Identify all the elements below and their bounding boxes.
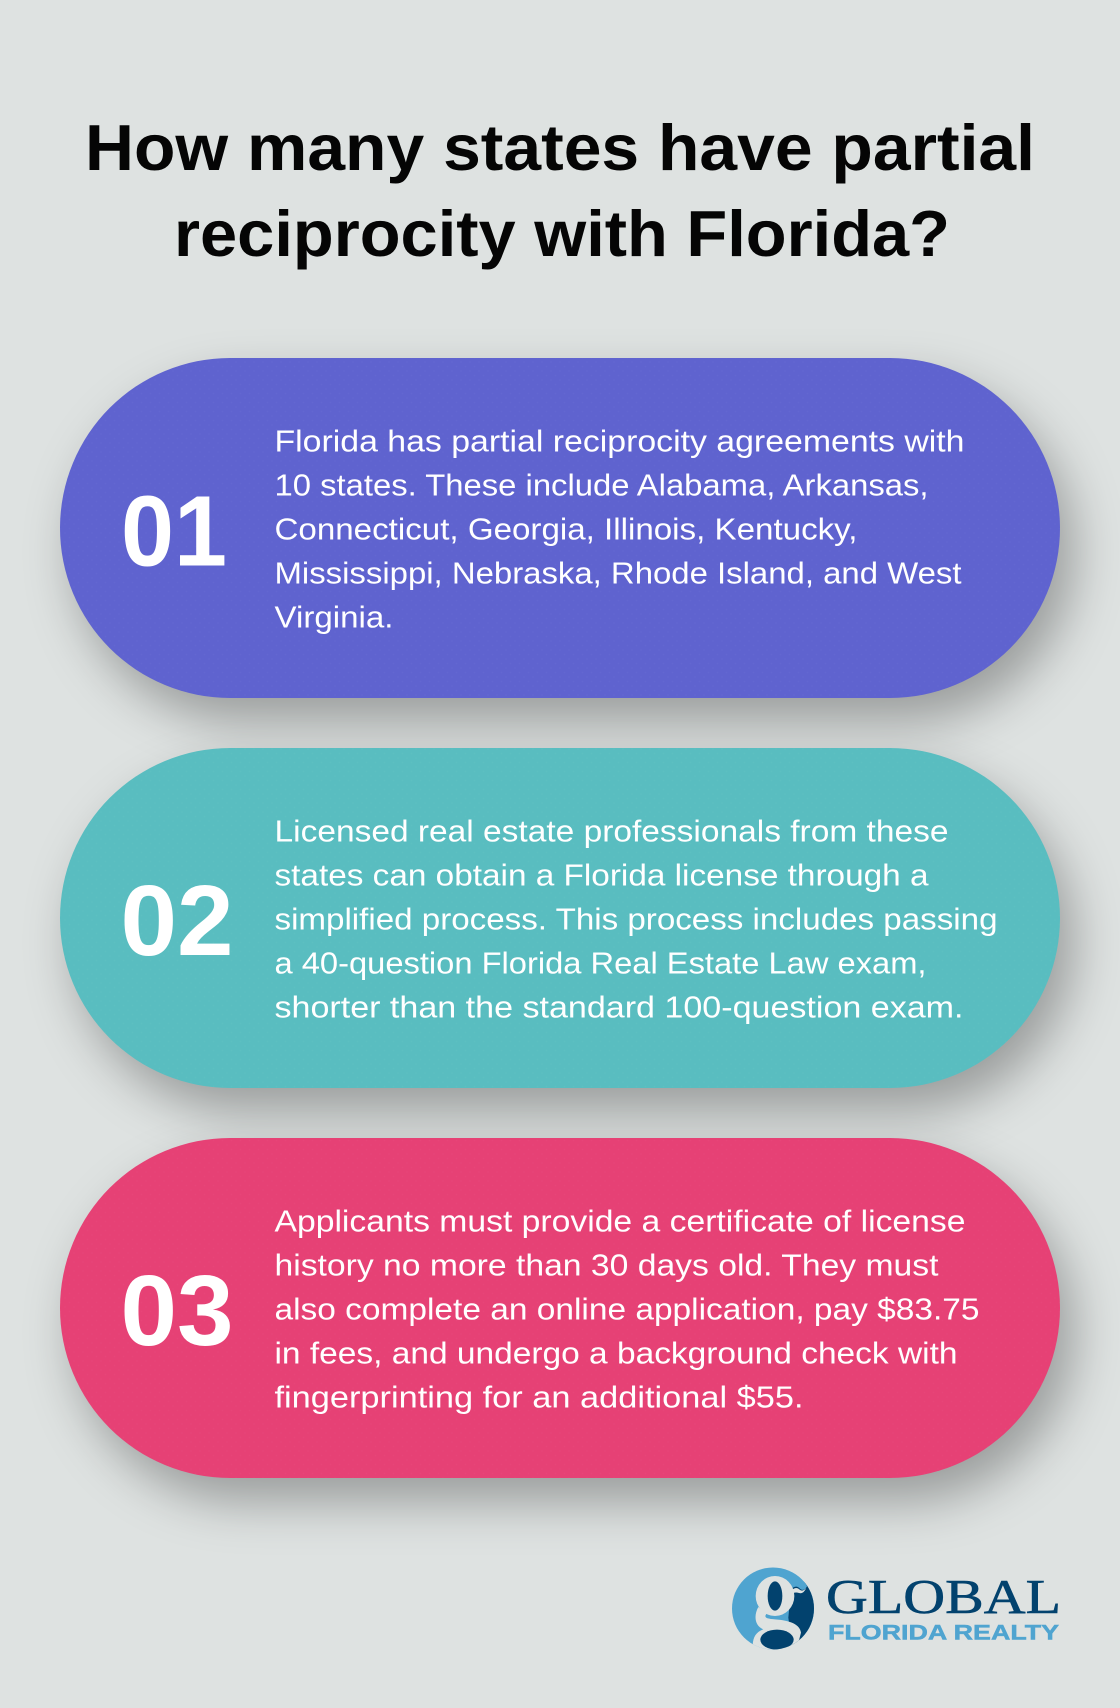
text block 03: history no more than 30 days old. They must <box>274 1248 939 1282</box>
text block 01 <box>274 424 964 634</box>
text block 01: Mississippi, Nebraska, Rhode Island, and West <box>274 556 962 590</box>
text block 03: Applicants must provide a certificate of license <box>274 1204 966 1238</box>
text block 01: Florida has partial reciprocity agreements with <box>274 424 964 458</box>
pill background 01 <box>60 358 1060 698</box>
title: How many states have partial <box>85 111 1035 184</box>
text block 02: a 40-question Florida Real Estate Law exam, <box>274 946 926 980</box>
panel: step 02 <box>60 748 1060 1088</box>
pill background 03 <box>60 1138 1060 1478</box>
text block 03: in fees, and undergo a background check with <box>274 1336 958 1370</box>
text block 02 <box>274 814 998 1024</box>
logo wordmark FLORIDA REALTY: FLORIDA REALTY <box>828 1620 1059 1644</box>
text block 02: simplified process. This process includes passing <box>274 902 998 936</box>
text block 03: also complete an online application, pay $83.75 <box>274 1292 980 1326</box>
text block 03: fingerprinting for an additional $55. <box>274 1380 804 1414</box>
number 01: 01 <box>121 476 227 588</box>
panel: step 03 <box>60 1138 1060 1478</box>
text block 03 <box>274 1204 980 1414</box>
text block 01: Connecticut, Georgia, Illinois, Kentucky, <box>274 512 858 546</box>
logo wordmark GLOBAL: GLOBAL <box>826 1569 1061 1624</box>
title <box>85 111 1035 270</box>
icon: g emblem <box>732 1568 814 1650</box>
panel: step 01 <box>60 358 1060 698</box>
title: reciprocity with Florida? <box>174 197 950 270</box>
text block 01: 10 states. These include Alabama, Arkansas, <box>274 468 928 502</box>
number 02: 02 <box>120 865 234 977</box>
number 03: 03 <box>120 1255 234 1367</box>
text block 01: Virginia. <box>274 600 394 634</box>
text block 02: shorter than the standard 100-question exam. <box>274 990 963 1024</box>
text block 02: states can obtain a Florida license through a <box>274 858 929 892</box>
logo: Global Florida Realty <box>732 1568 1061 1656</box>
pill background 02 <box>60 748 1060 1088</box>
text block 02: Licensed real estate professionals from these <box>274 814 949 848</box>
